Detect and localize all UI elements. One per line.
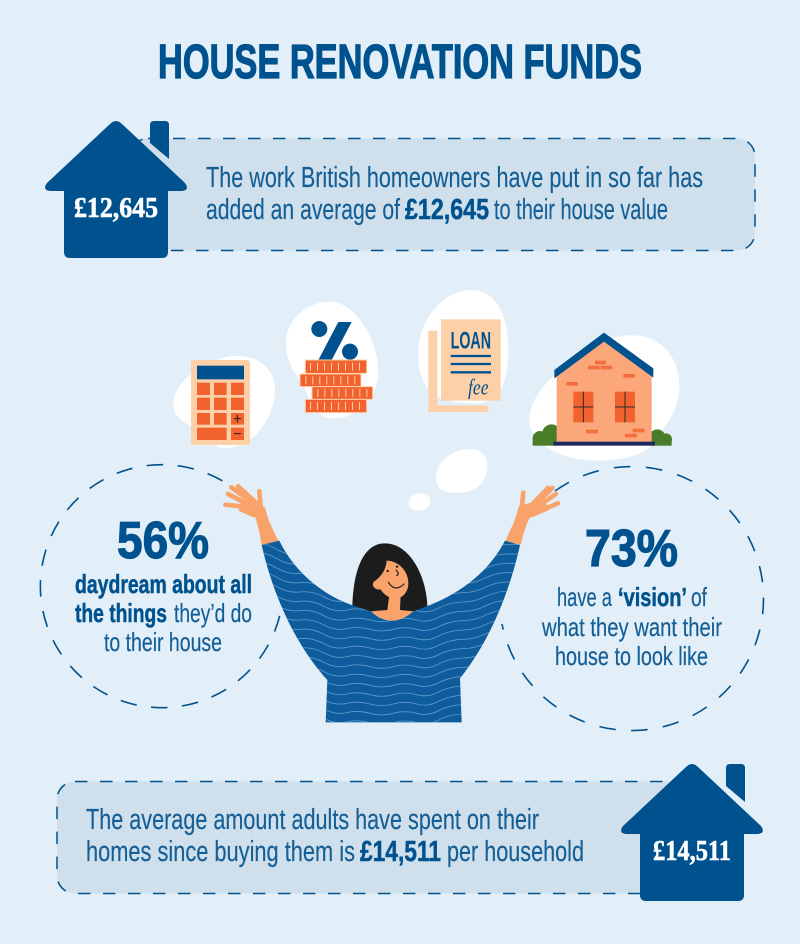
stat description: what they want their <box>541 612 722 642</box>
callout text: added an average of <box>206 194 401 226</box>
thought bubbles <box>407 449 487 513</box>
illustration: woman with raised arms <box>225 486 558 724</box>
stat description: have a <box>557 582 612 612</box>
right arm <box>505 488 558 545</box>
callout text: £14,511 <box>360 836 441 868</box>
panel: 56 percent stat <box>40 465 281 708</box>
icon: house with value <box>45 121 187 258</box>
callout text: £12,645 <box>405 194 489 226</box>
icon: loan document: LOAN <box>451 327 491 354</box>
callout box <box>130 138 755 250</box>
callout text: The average amount adults have spent on their <box>86 804 539 836</box>
stat description: they’d do <box>174 598 252 628</box>
icon: house with value: £14,511 <box>653 835 731 867</box>
stat description: daydream about all <box>75 569 252 599</box>
stat description: the things <box>75 598 167 628</box>
stat description: ‘vision’ <box>618 582 687 612</box>
striped sweater <box>253 541 533 724</box>
stat description: of <box>691 582 708 612</box>
callout text: homes since buying them is <box>86 836 355 868</box>
callout text: to their house value <box>494 194 668 226</box>
stat description: house to look like <box>555 641 708 671</box>
stat description <box>541 582 722 671</box>
panel: bottom callout <box>57 764 763 901</box>
icon: brick house <box>529 333 679 461</box>
stat description: to their house <box>104 627 222 657</box>
callout box <box>57 782 697 894</box>
stat value 73%: 73% <box>585 520 678 578</box>
stat description <box>75 569 252 657</box>
dashed circle left <box>40 465 281 708</box>
icon: loan document <box>418 290 508 412</box>
callout text <box>206 162 703 226</box>
callout text: per household <box>447 836 584 868</box>
panel: 73 percent stat <box>502 467 764 731</box>
icon: percent and coins <box>286 302 378 418</box>
icon: calculator <box>173 356 275 448</box>
left arm <box>225 486 279 545</box>
stat value 56%: 56% <box>117 512 209 570</box>
icon: house with value: £12,645 <box>74 192 158 224</box>
icon: house with value <box>621 764 763 901</box>
dashed circle right <box>502 467 764 731</box>
callout text <box>86 804 584 868</box>
panel: top callout <box>45 121 755 258</box>
icon: loan document: fee <box>468 374 489 399</box>
